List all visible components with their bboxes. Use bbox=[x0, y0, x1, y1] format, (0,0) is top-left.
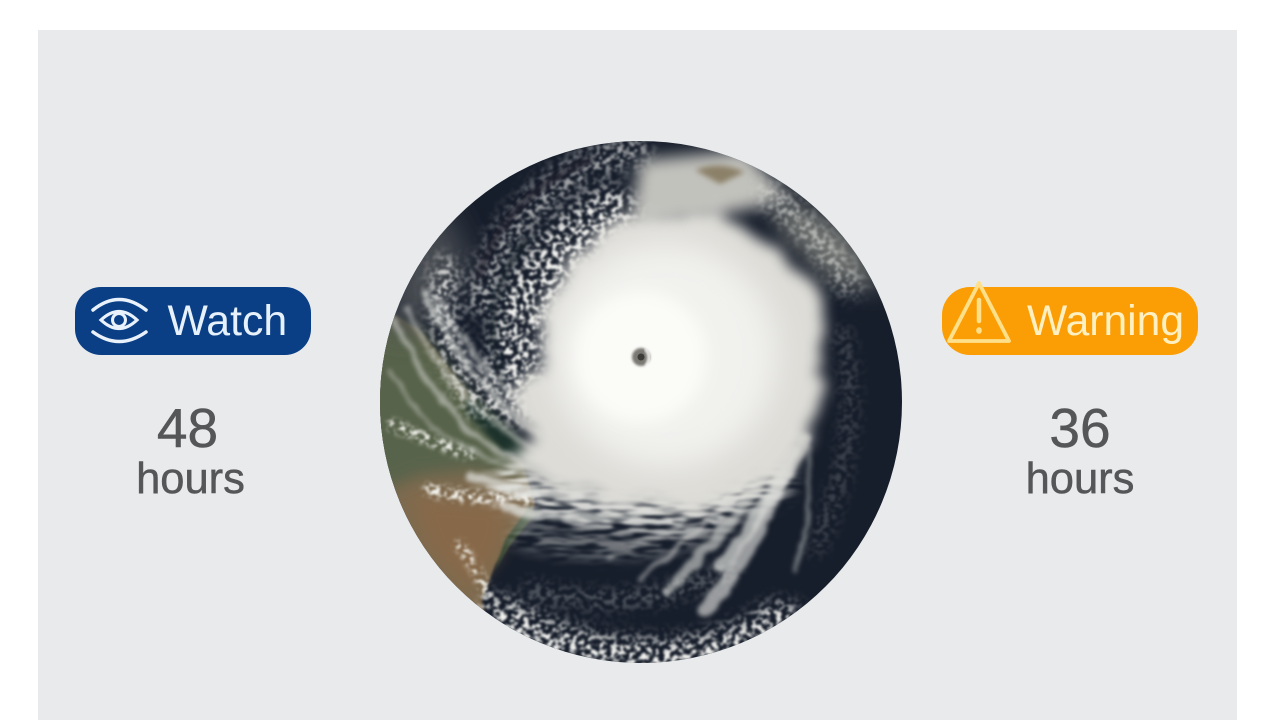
pill: Watch bbox=[75, 287, 311, 355]
streaked outflow bands bbox=[510, 480, 770, 547]
number: 48: 48 bbox=[157, 397, 218, 459]
icon: eye bbox=[93, 300, 146, 342]
stat: 48 hours bbox=[136, 397, 245, 503]
badge: Watch bbox=[75, 287, 311, 355]
haze: upper right and top bbox=[385, 150, 885, 330]
satellite image: hurricane bbox=[360, 130, 910, 670]
unit: hours: hours bbox=[136, 455, 245, 503]
pill: Warning bbox=[942, 287, 1198, 355]
dark gaps in the upper-left bands bbox=[480, 160, 590, 390]
central dense overcast bbox=[505, 209, 826, 510]
stat: 36 hours bbox=[1026, 397, 1134, 503]
label: Watch: Watch bbox=[168, 297, 287, 345]
ocean bbox=[370, 130, 910, 670]
number: 36: 36 bbox=[1049, 397, 1111, 459]
eye of the storm bbox=[632, 348, 650, 366]
unit: hours: hours bbox=[1026, 455, 1134, 503]
land mass bbox=[380, 313, 536, 612]
speckled cumulus fields bbox=[442, 150, 850, 667]
spiral cloud streaks bbox=[390, 290, 810, 610]
cloud patches over land bbox=[392, 425, 530, 600]
icon: warning triangle bbox=[949, 283, 1009, 341]
label: Warning: Warning bbox=[1027, 297, 1184, 345]
badge: Warning bbox=[942, 283, 1198, 355]
